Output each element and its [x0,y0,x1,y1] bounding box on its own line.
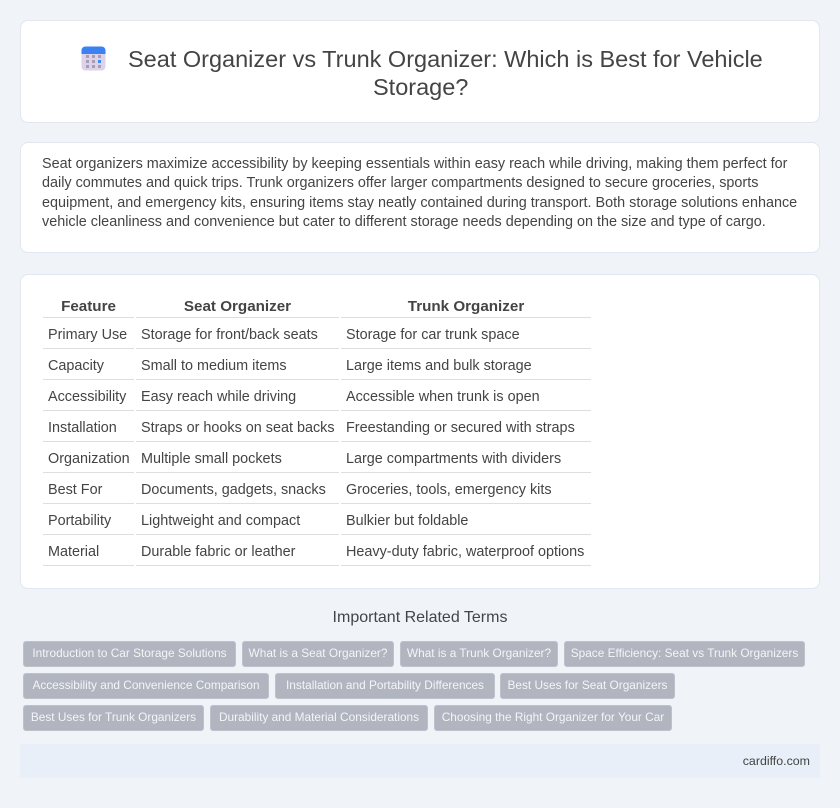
panel: comparison table: Durable fabric or leather [141,544,295,560]
icon: calendar [82,46,106,70]
panel: comparison table: Organization [48,451,130,467]
panel: comparison table: Bulkier but foldable [346,513,468,529]
panel: comparison table: Material [48,544,99,560]
panel: comparison table: Storage for car trunk space [346,327,520,343]
panel: comparison table: Trunk Organizer [408,298,524,315]
panel: comparison table: Multiple small pockets [141,451,282,467]
panel: related term tags: Installation and Portability Differences [286,678,484,692]
panel: related term tags: What is a Seat Organizer? [249,646,387,660]
footer: cardiffo.com [743,754,810,768]
panel: comparison table: Accessible when trunk is open [346,389,540,405]
panel: related term tags: Best Uses for Seat Organizers [508,678,667,692]
panel: comparison table: Feature [61,298,116,315]
title [128,46,763,100]
panel: related term tags [23,641,805,731]
panel: comparison table: Small to medium items [141,358,287,374]
panel: comparison table: Capacity [48,358,104,374]
text block: description: equipment, and emergency kits, ensuring items stay neatly contained during transport. Both storage solutions enhance [42,194,797,210]
panel: related term tags: Accessibility and Convenience Comparison [32,678,260,692]
panel: comparison table: Portability [48,513,111,529]
panel: comparison table: Documents, gadgets, snacks [141,482,326,498]
panel: related term tags: What is a Trunk Organizer? [407,646,551,660]
panel: comparison table: Heavy-duty fabric, waterproof options [346,544,584,560]
panel: comparison table: Straps or hooks on seat backs [141,420,335,436]
panel: comparison table: Large compartments with dividers [346,451,561,467]
title: Seat Organizer vs Trunk Organizer: Which is Best for Vehicle [128,46,763,72]
panel: related term tags: Durability and Material Considerations [219,710,419,724]
panel: comparison table: Accessibility [48,389,126,405]
panel: comparison table: Storage for front/back seats [141,327,318,343]
panel: comparison table: Installation [48,420,117,436]
panel: comparison table: Seat Organizer [184,298,291,315]
footer [20,744,820,778]
panel: comparison table: Lightweight and compact [141,513,300,529]
panel: comparison table: Large items and bulk storage [346,358,532,374]
panel: title header [20,20,820,123]
text block: description [42,156,797,230]
panel: comparison table [20,274,820,589]
panel: related term tags: Choosing the Right Organizer for Your Car [442,710,664,724]
panel: comparison table: Best For [48,482,102,498]
text block: description: daily commutes and quick trips. Trunk organizers offer larger compartments designed to secure groceries, sports [42,175,758,191]
panel: related term tags: Best Uses for Trunk Organizers [31,710,196,724]
text block: description: Seat organizers maximize accessibility by keeping essentials within easy reach while driving, making them perfect for [42,156,787,172]
panel: related term tags: Space Efficiency: Seat vs Trunk Organizers [571,646,798,660]
panel: comparison table: Easy reach while driving [141,389,296,405]
panel: related term tags: Introduction to Car Storage Solutions [32,646,227,660]
panel: comparison table: Groceries, tools, emergency kits [346,482,552,498]
panel: description [20,142,820,253]
heading: related terms: Important Related Terms [333,609,507,626]
panel: comparison table: Freestanding or secured with straps [346,420,575,436]
title: Storage? [373,74,468,100]
panel: comparison table: Primary Use [48,327,127,343]
text block: description: vehicle cleanliness and convenience but cater to different storage needs depending on the size and type of cargo. [42,214,766,230]
